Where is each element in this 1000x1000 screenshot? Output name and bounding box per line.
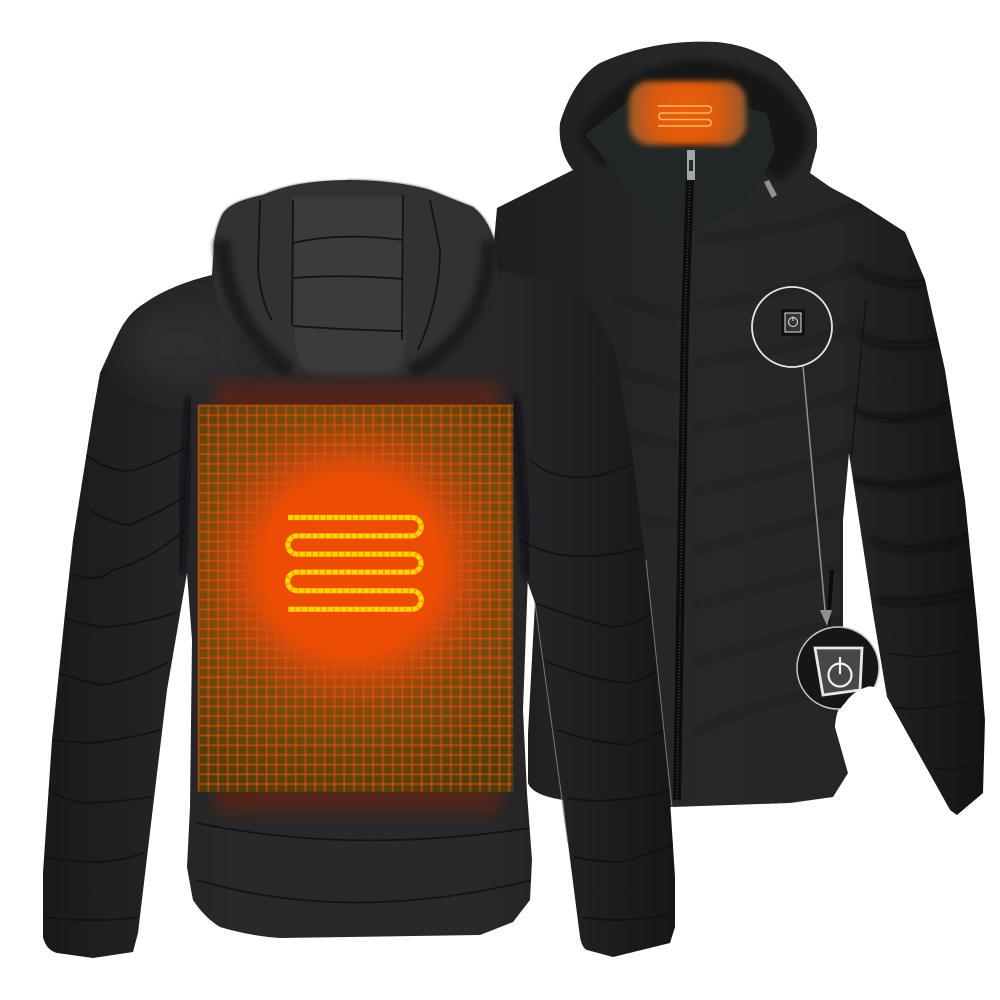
back view jacket xyxy=(43,180,675,958)
collar xyxy=(585,100,775,232)
hood interior xyxy=(578,60,808,180)
side pocket xyxy=(828,570,832,625)
hood seams xyxy=(258,195,440,350)
callout circle: enlarged power button xyxy=(797,627,879,709)
central glow xyxy=(238,451,466,679)
white cut-out between sleeve and body xyxy=(835,686,950,810)
neck heating coil xyxy=(658,106,712,126)
central heating coil xyxy=(288,518,421,609)
shoulder sheen xyxy=(120,305,240,385)
arrow from small button to enlarged button xyxy=(803,366,832,626)
icon: small power button xyxy=(781,309,805,336)
arm and body separation shadow xyxy=(180,400,190,570)
jacket body silhouette xyxy=(480,42,985,815)
zipper pull xyxy=(687,150,695,180)
icon: enlarged power button xyxy=(815,648,862,695)
hood xyxy=(214,180,497,378)
front view jacket xyxy=(480,42,985,815)
zipper xyxy=(677,150,695,800)
hood side darkening xyxy=(222,240,490,372)
heating grid lines xyxy=(198,405,513,792)
warm grid base xyxy=(198,405,513,792)
arm seams xyxy=(43,445,675,920)
hood shape xyxy=(214,180,497,378)
callout circle: small power button xyxy=(752,287,832,367)
heat halo, clipped to jacket xyxy=(215,382,500,812)
quilting seams, front xyxy=(844,265,974,770)
drawstring toggle xyxy=(764,180,777,198)
sleeve edge highlight xyxy=(535,560,672,843)
back jacket silhouette xyxy=(43,180,675,958)
back shading and quilting xyxy=(43,305,675,920)
neck heating panel xyxy=(629,81,746,145)
hood centre panel xyxy=(293,197,405,372)
heating panel on back xyxy=(198,382,513,812)
